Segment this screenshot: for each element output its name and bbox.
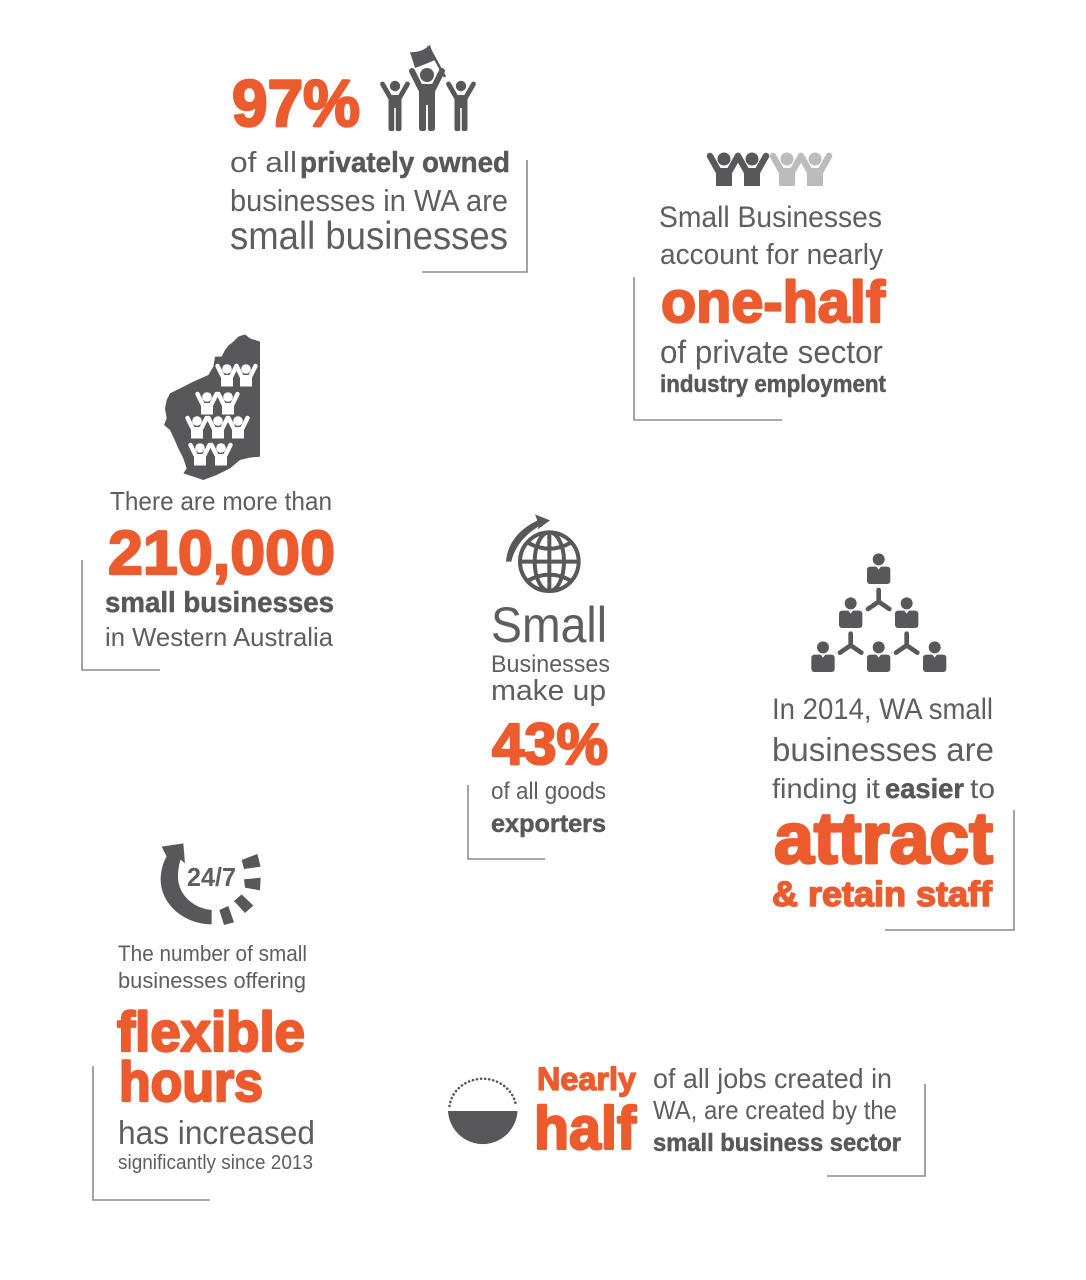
text: number of small businesses: The number of small	[118, 941, 307, 966]
icon: half-filled circle	[448, 1079, 518, 1144]
text: small businesses make up: make up	[491, 675, 606, 707]
panel: one-half	[634, 152, 886, 420]
panel: attract staff	[772, 553, 1014, 930]
panel: 43 percent	[468, 514, 610, 859]
text: account for nearly: Small Businesses	[659, 201, 882, 234]
bracket	[422, 160, 527, 272]
text: account for nearly	[659, 201, 883, 271]
icon: 24/7 clock arrow: 24/7	[187, 862, 236, 892]
text: privately owned	[230, 147, 510, 258]
stat: flexible hours: hours	[119, 1050, 263, 1113]
text: privately owned: businesses in WA are	[230, 183, 508, 218]
stat: nearly half: half	[534, 1095, 637, 1162]
text: of all goods exporters: exporters	[491, 810, 606, 838]
text: of all goods exporters: of all goods	[491, 778, 606, 805]
text: finding it easier: easier	[885, 773, 964, 804]
stat: nearly half	[534, 1061, 637, 1162]
stat: flexible hours: flexible	[117, 1000, 305, 1063]
text: finding it easier: finding it	[772, 773, 880, 804]
stat: nearly half: Nearly	[537, 1061, 636, 1097]
text: small businesses make up: Small	[491, 597, 607, 653]
text: jobs created	[653, 1063, 901, 1157]
text: small businesses in Western Australia: in Western Australia	[105, 622, 334, 652]
icon: 24/7 clock arrow	[161, 843, 261, 925]
text: finding it easier: businesses are	[772, 731, 994, 768]
stat: attract & retain staff: & retain staff	[772, 875, 992, 914]
text: small businesses make up: Businesses	[491, 651, 610, 678]
panel: 97 percent	[230, 45, 527, 272]
text: account for nearly: account for nearly	[660, 239, 883, 271]
icon: three people with flag	[382, 45, 474, 131]
bracket	[634, 277, 782, 420]
text: small businesses in Western Australia	[105, 587, 334, 652]
stat: attract & retain staff	[772, 799, 993, 914]
text: has increased	[118, 1114, 315, 1174]
panel: nearly half	[448, 1061, 925, 1176]
stat: 210,000: 210,000	[108, 519, 335, 588]
text: private sector	[660, 334, 886, 398]
stat: 97%: 97%	[232, 66, 360, 140]
text: finding it easier: In 2014, WA small	[772, 693, 993, 726]
text: privately owned: privately owned	[300, 147, 510, 179]
icon: organisation pyramid	[811, 553, 946, 672]
text: jobs created: of all jobs created in	[653, 1063, 892, 1094]
icon: four people, two highlighted	[710, 152, 829, 186]
text: private sector: industry employment	[660, 371, 886, 398]
bracket	[468, 785, 545, 859]
text: has increased: has increased	[118, 1114, 315, 1151]
stat: 43%: 43%	[492, 712, 608, 777]
text: finding it easier: to	[970, 773, 995, 804]
stat: attract & retain staff: attract	[774, 799, 993, 879]
bracket	[93, 1066, 210, 1200]
text: number of small businesses: businesses offering	[118, 968, 306, 993]
panel: 210,000	[82, 334, 335, 670]
stat: flexible hours	[117, 1000, 305, 1113]
text: privately owned: of all	[230, 147, 297, 179]
bracket	[827, 1084, 925, 1176]
text: finding it easier	[772, 693, 995, 804]
text: jobs created: small business sector	[653, 1129, 901, 1157]
text: privately owned: small businesses	[230, 215, 508, 258]
text: of all goods exporters	[491, 778, 606, 838]
stat: one-half: one-half	[661, 270, 886, 335]
bracket	[82, 560, 160, 670]
text: small businesses in Western Australia: small businesses	[105, 587, 334, 619]
text: private sector: of private sector	[660, 334, 883, 370]
text: there are more than: There are more than	[110, 486, 332, 516]
text: small businesses make up	[491, 597, 610, 707]
text: number of small businesses	[118, 941, 307, 993]
text: jobs created: WA, are created by the	[653, 1095, 897, 1125]
bracket	[885, 810, 1014, 930]
panel: flexible hours	[93, 843, 315, 1200]
icon: globe with arrow	[506, 514, 579, 591]
icon: map of Western Australia with people	[164, 334, 260, 480]
text: has increased: significantly since 2013	[118, 1152, 313, 1174]
